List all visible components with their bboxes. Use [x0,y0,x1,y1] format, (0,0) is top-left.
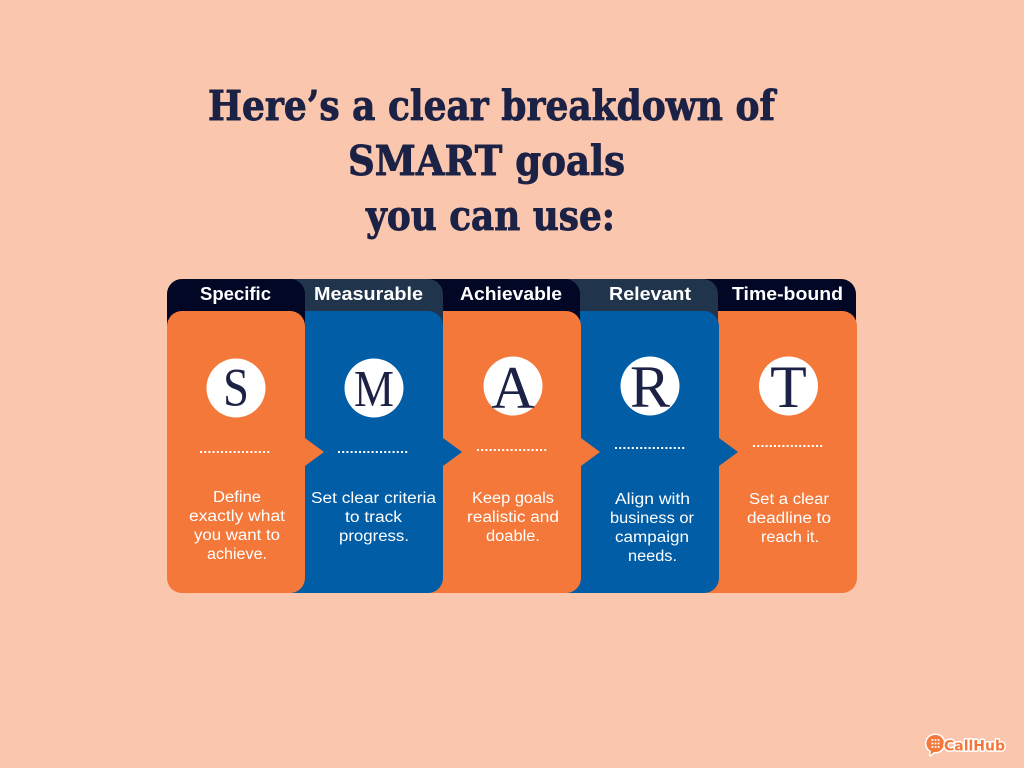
card body: relevant [550,311,719,593]
text: specific: achieve. [207,546,267,563]
text: achievable [467,490,559,545]
title: SMART goals [348,137,625,185]
text: specific: you want to [194,527,280,544]
heading: time-bound: Time-bound [732,283,843,304]
header tab: measurable [270,279,443,330]
icon: letter S: S [223,358,249,418]
card body: specific [167,311,305,593]
logo: CallHub [926,735,1005,755]
heading: measurable: Measurable [314,283,423,304]
icon: letter R [620,354,680,420]
dotted divider: achievable [477,449,548,451]
card body: measurable [270,311,443,593]
header tab: relevant [550,279,718,330]
text: time-bound [747,491,831,546]
dotted divider: relevant [615,447,686,449]
text: achievable: doable. [486,528,540,545]
card body: achievable [410,311,581,593]
title: you can use: [365,192,615,240]
panel: relevant [550,279,738,593]
text: relevant: Align with [615,491,690,508]
text: specific [189,489,286,563]
dotted divider: time-bound [753,445,824,447]
panel: specific [167,279,324,593]
text: time-bound: deadline to [747,510,831,527]
text: measurable: to track [345,509,402,526]
icon: letter A: A [491,355,535,421]
dotted divider: specific [200,451,271,453]
icon: letter T: T [770,354,807,420]
text: relevant: needs. [628,548,677,565]
header tab: achievable [410,279,580,330]
panel: time-bound [690,279,857,593]
text: measurable [311,490,436,545]
icon: letter T [759,354,818,420]
text: specific: Define [213,489,261,506]
panel: achievable [410,279,600,593]
text: specific: exactly what [189,508,286,525]
text: relevant: campaign [615,529,689,546]
text: measurable: progress. [339,528,409,545]
wordmark: CallHub [944,738,1005,754]
text: time-bound: reach it. [761,529,819,546]
arrow: measurable to achievable [443,438,462,466]
dotted divider: measurable [338,451,409,453]
heading: achievable: Achievable [460,283,562,304]
icon: letter R: R [630,354,670,420]
heading: relevant: Relevant [609,283,691,304]
text: time-bound: Set a clear [749,491,829,508]
text: achievable: Keep goals [472,490,554,507]
title: Here’s a clear breakdown of [208,82,777,130]
title [208,82,777,240]
heading: specific: Specific [200,283,271,304]
icon: letter M: M [354,361,394,418]
panel: measurable [270,279,462,593]
arrow: relevant to time-bound [719,438,738,466]
icon: letter S [206,358,266,418]
text: relevant: business or [610,510,694,527]
text: relevant [610,491,694,565]
card body: time-bound [690,311,857,593]
text: achievable: realistic and [467,509,559,526]
arrow: specific to measurable [305,438,324,466]
header tab: specific [167,279,305,330]
icon: chat bubble [926,735,944,755]
arrow: achievable to relevant [581,438,600,466]
text: measurable: Set clear criteria [311,490,436,507]
header tab: time-bound [690,279,856,330]
